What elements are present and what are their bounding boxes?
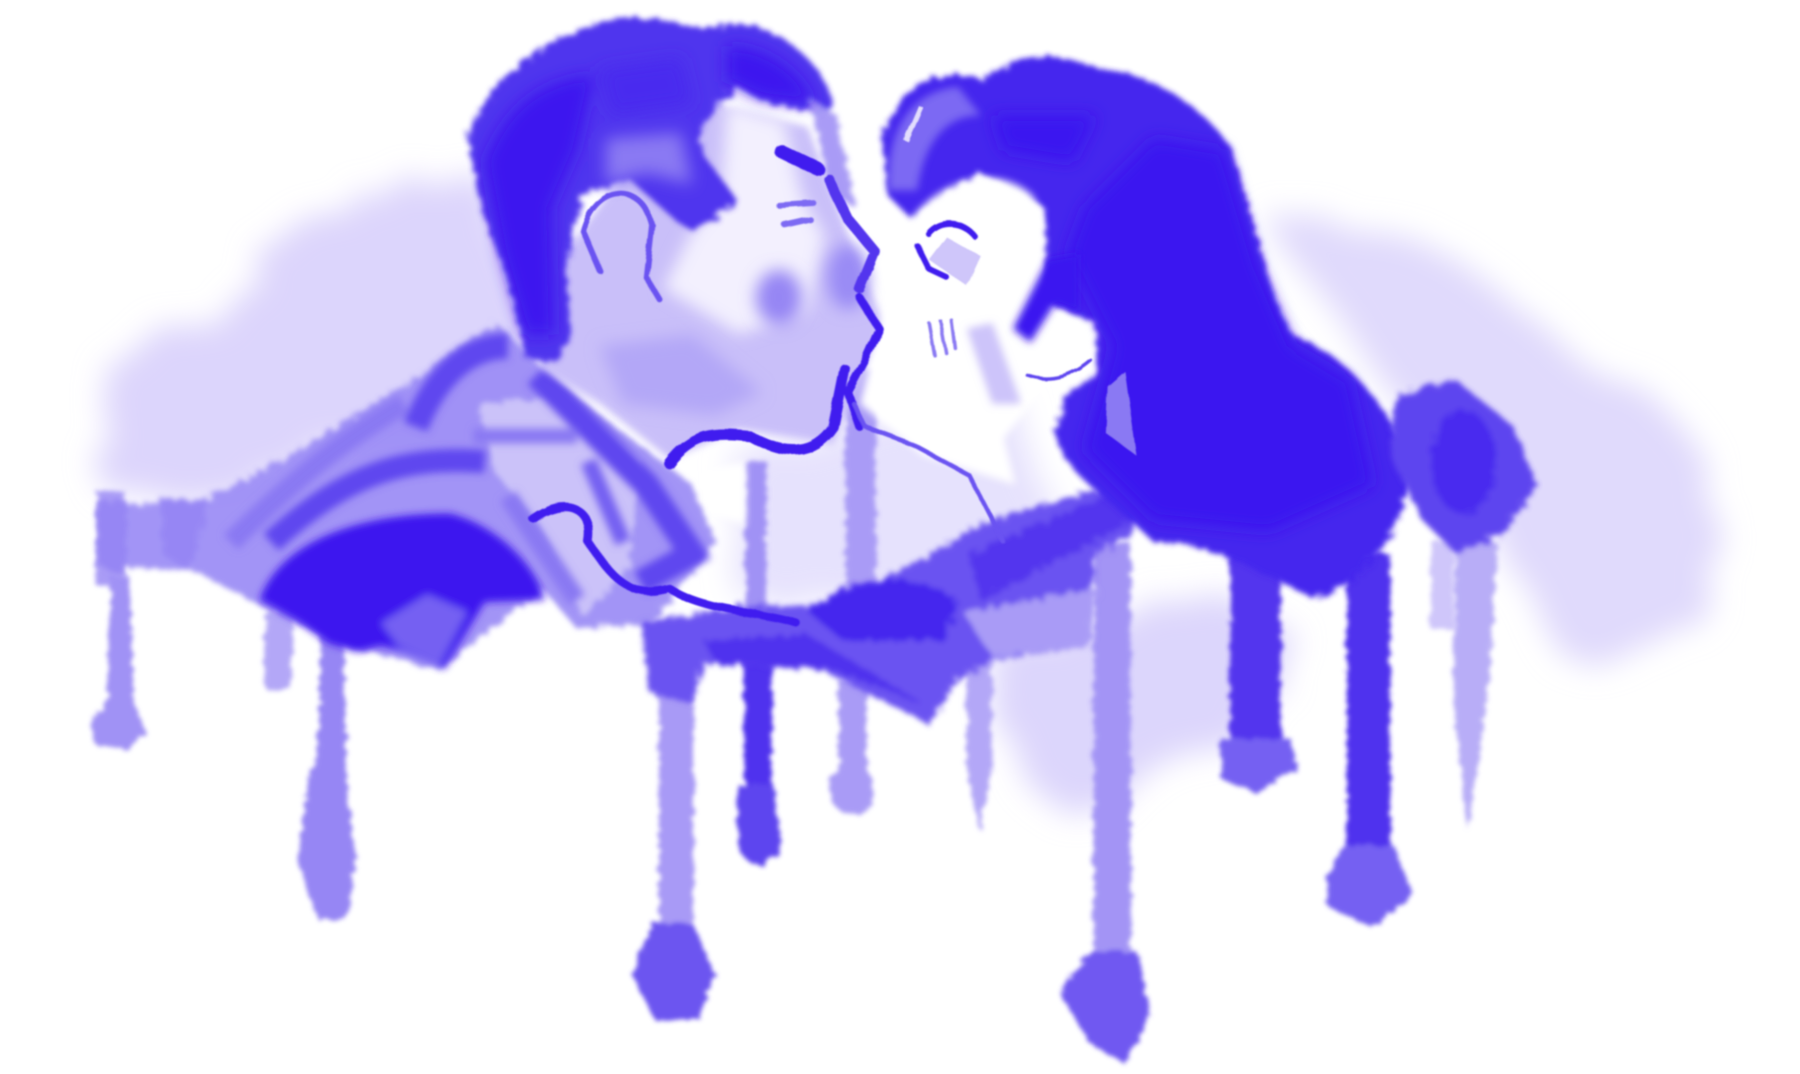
hand line xyxy=(533,507,796,623)
woman's face details xyxy=(929,236,981,286)
drips xyxy=(90,369,1498,1064)
neck contour xyxy=(854,404,1004,542)
drip: short left xyxy=(264,611,292,690)
collar highlight xyxy=(697,461,745,525)
drip: dark short xyxy=(1221,531,1297,794)
drip: center left xyxy=(632,646,715,1021)
man's jaw mottling xyxy=(600,335,762,415)
drip: far left xyxy=(90,491,146,750)
man's ear xyxy=(583,193,660,300)
drip: tall center right xyxy=(1059,542,1150,1064)
man's face xyxy=(542,104,886,459)
man's hair xyxy=(467,17,856,363)
cheek lines xyxy=(929,321,955,355)
woman's eyelash xyxy=(929,224,975,236)
arm and sleeve xyxy=(640,479,1136,724)
man's forehead light xyxy=(664,104,825,335)
woman's face xyxy=(860,178,1094,485)
drip: far right xyxy=(1431,542,1498,831)
man's eye xyxy=(779,203,813,225)
drip: center dark xyxy=(737,461,781,865)
drip: tapered xyxy=(965,565,992,831)
facial line work xyxy=(533,151,1090,623)
man's jaw xyxy=(669,369,845,464)
shirt brush strokes xyxy=(231,346,692,600)
man's eyebrow xyxy=(781,151,817,168)
man's cheek and nose shadows xyxy=(756,245,869,325)
chin line xyxy=(1027,360,1090,378)
background wash xyxy=(98,177,1714,813)
woman's hair side lock xyxy=(1105,371,1136,456)
drip: center pale xyxy=(830,369,876,814)
woman's hair over cheek xyxy=(1013,254,1079,343)
man's nose line xyxy=(828,179,875,288)
man's shoulder and shirt xyxy=(97,323,715,669)
woman's hair xyxy=(883,57,1413,600)
shirt dark sleeve xyxy=(260,513,545,669)
woman's pom bun xyxy=(1390,378,1537,551)
lips xyxy=(848,298,879,427)
drip: left long xyxy=(298,634,356,919)
man's head xyxy=(467,17,886,459)
drip: right long xyxy=(1327,554,1412,929)
